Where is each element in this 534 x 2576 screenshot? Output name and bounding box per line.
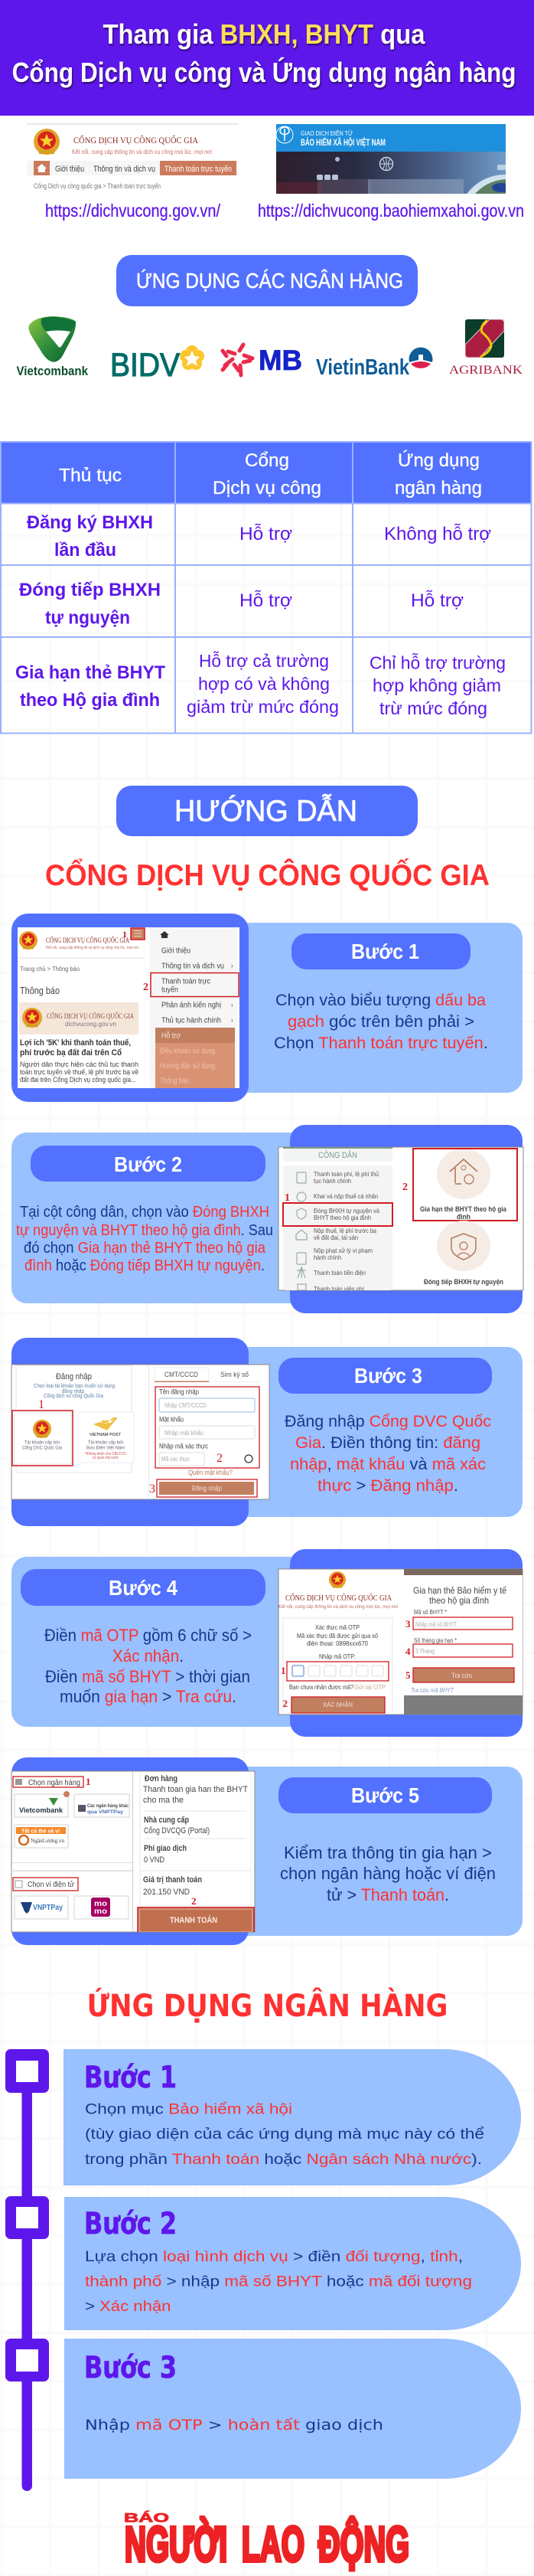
- row: gia hạn thẻ BHYT: giảm trừ mức đóng: [187, 697, 339, 717]
- step 3 text: thực > Đăng nhập .: [317, 1477, 458, 1495]
- step 3 screenshot: Nhập mật khẩu: [164, 1429, 204, 1437]
- step 4 screenshot: Số tháng gia hạn *: [414, 1637, 457, 1644]
- screenshot: Bảo hiểm xã hội Việt Nam header: GIAO DỊCH ĐIỆN TỬ: [301, 129, 353, 137]
- step 3 panel: [11, 1338, 523, 1526]
- step 3 screenshot: Chọn loại tài khoản bạn muốn sử dụng: [34, 1382, 115, 1389]
- heading pill: hướng dẫn: [116, 786, 418, 836]
- step 1 label: Bước 1: [351, 940, 419, 963]
- step 1 screenshot: đất đai trên Cổng Dịch vụ công quốc gia...: [20, 1076, 136, 1084]
- heading pill: hướng dẫn: HƯỚNG DẪN: [174, 794, 357, 828]
- step 1 panel: [11, 914, 523, 1102]
- step 1 screenshot: Trang chủ > Thông báo: [20, 966, 80, 973]
- logo: Vietcombank: [17, 316, 88, 378]
- step 5 screenshot: THANH TOÁN: [170, 1915, 217, 1925]
- step 4 screenshot: Nhập mã OTP:: [319, 1652, 356, 1660]
- step 1 screenshot: Thông tin và dịch vụ: [161, 962, 224, 971]
- step 4 screenshot: XÁC NHẬN: [323, 1701, 353, 1708]
- timeline node 3: [5, 2339, 49, 2381]
- step 3 screenshot: *Không dành cho CBCCVC: [85, 1452, 126, 1456]
- step 1 screenshot: CỔNG DỊCH VỤ CÔNG QUỐC GIA: [47, 1012, 134, 1020]
- step 1 screenshot: Thanh toán trực: [161, 977, 210, 986]
- bank step 1: (tùy giao diện của các ứng dụng mà mục này có thể: [85, 2127, 484, 2143]
- step 2 screenshot: Thanh toán viện phí: [314, 1285, 365, 1293]
- step 1 screenshot: Thông báo: [160, 1077, 189, 1086]
- step 2 screenshot: Nộp thuế, lệ phí trước bạ: [314, 1227, 376, 1234]
- bank step 3: Bước 3: [84, 2351, 177, 2385]
- step 4 screenshot: CỔNG DỊCH VỤ CÔNG QUỐC GIA: [285, 1593, 392, 1603]
- logo: MB: MB: [259, 345, 302, 376]
- heading pill: ứng dụng các ngân hàng: ỨNG DỤNG CÁC NGÂN HÀNG: [136, 269, 403, 293]
- step 2 screenshot: Nộp phạt xử lý vi phạm: [314, 1247, 373, 1254]
- step 2 label: [31, 1146, 265, 1182]
- step 3 label: [278, 1358, 492, 1394]
- step 4 screenshot: [278, 1569, 523, 1715]
- bank step 1: [63, 2049, 521, 2185]
- row: gia hạn thẻ BHYT: theo Hộ gia đình: [20, 690, 160, 711]
- step 3 screenshot: Mật khẩu: [159, 1415, 184, 1424]
- screenshot: Bảo hiểm xã hội Việt Nam header: [276, 124, 506, 194]
- step 5 screenshot: mo: [94, 1907, 107, 1916]
- step 2 label: Bước 2: [114, 1152, 182, 1176]
- step 3 screenshot: Tên đăng nhập: [159, 1388, 199, 1397]
- step 4 panel: [11, 1549, 523, 1737]
- logo: báo Người Lao Động: BÁO: [124, 2510, 169, 2525]
- step 1 screenshot: Thủ tục hành chính: [161, 1015, 221, 1025]
- step 1 screenshot: ›: [231, 1002, 233, 1008]
- title banner: [0, 0, 534, 116]
- step 5 screenshot: Các ngân hàng khác: [87, 1803, 129, 1809]
- step 2 text: Tại cột công dân, chọn vào Đóng BHXH: [20, 1204, 269, 1221]
- title text: Tham gia BHXH, BHYT qua: [103, 18, 425, 50]
- step 3 screenshot: 1: [38, 1398, 44, 1411]
- step 2 screenshot: đình: [457, 1213, 471, 1221]
- step 5 text: chọn ngân hàng hoặc ví điện: [280, 1864, 496, 1883]
- step 4 screenshot: 2: [283, 1698, 288, 1709]
- screenshot: Cổng Dịch vụ công quốc gia header: Kết nối, cung cấp thông tin và dịch vụ công mọi lúc, mọi nơi: [72, 149, 212, 155]
- step 5 text: [280, 1843, 496, 1904]
- step 1 screenshot: Người dân thực hiện các thủ tục thanh: [20, 1061, 138, 1068]
- step 4 text: Điền mã số BHYT > thời gian: [45, 1667, 250, 1686]
- step 2 screenshot: hành chính: [314, 1254, 341, 1261]
- step 1 screenshot: Kết nối, cung cấp thông tin và dịch vụ công mọi lúc, mọi nơi: [46, 946, 138, 950]
- step 2 screenshot: Đóng tiếp BHXH tự nguyện: [424, 1278, 503, 1286]
- step 4 screenshot: Nhập mã số BHYT: [415, 1621, 457, 1628]
- step 2 screenshot: tục hành chính: [314, 1177, 351, 1185]
- step 1 screenshot: Giới thiệu: [161, 946, 190, 956]
- step 5 screenshot: mo: [94, 1900, 107, 1908]
- step 1 screenshot: ›: [231, 1017, 233, 1024]
- row: gia hạn thẻ BHYT: Gia hạn thẻ BHYT: [15, 662, 165, 683]
- step 3 screenshot: Nhập mã xác thực: [159, 1443, 208, 1450]
- step 1 label: [291, 933, 471, 969]
- step 2 screenshot: Khai và nộp thuế cá nhân: [314, 1192, 378, 1200]
- step 4 screenshot: 4: [405, 1646, 411, 1657]
- step 3 screenshot: Tài khoản cấp bởi: [88, 1438, 123, 1446]
- step 5 screenshot: Chọn ngân hàng: [28, 1778, 80, 1787]
- step 1 screenshot: 1: [122, 929, 127, 940]
- step 1 screenshot: [18, 927, 239, 1088]
- step 3 text: nhập, mật khẩu và mã xác: [290, 1456, 486, 1473]
- logo: Vietcombank: Vietcombank: [17, 364, 88, 378]
- step 5 screenshot: cho ma the: [143, 1796, 184, 1805]
- step 1 text: gạch góc trên bên phải >: [288, 1013, 474, 1031]
- step 1 text: Chọn vào biểu tượng dấu ba: [275, 992, 486, 1009]
- step 4 screenshot: Kết nối, cung cấp thông tin và dịch vụ công mọi lúc, mọi nơi: [278, 1605, 398, 1610]
- step 5 screenshot: 0 VND: [144, 1855, 164, 1865]
- bank step 1: Chọn mục Bảo hiểm xã hội: [85, 2101, 292, 2118]
- step 5 screenshot: Vietcombank: [19, 1806, 63, 1815]
- row: đóng tiếp BHXH tự nguyện: [19, 580, 464, 628]
- step 3 screenshot: [11, 1365, 269, 1499]
- table header row: [1, 442, 531, 504]
- step 3 screenshot: Mã xác thực: [161, 1455, 190, 1463]
- step 5 screenshot: NgânLượng.vn: [31, 1838, 65, 1844]
- bank step 2: Bước 2: [84, 2207, 177, 2241]
- step 4 text: muốn gia hạn > Tra cứu.: [60, 1687, 236, 1706]
- row: đăng ký BHXH lần đầu: Hỗ trợ: [239, 524, 292, 544]
- row: gia hạn thẻ BHYT: hợp có và không: [198, 674, 330, 694]
- step 3 screenshot: đăng nhập: [62, 1388, 84, 1394]
- step 2 screenshot: CÔNG DÂN: [318, 1150, 357, 1160]
- step 3 screenshot: cơ quan nhà nước: [93, 1456, 119, 1460]
- step 5 screenshot: [11, 1771, 255, 1934]
- step 2 screenshot: Thanh toán phí, lệ phí thủ: [314, 1170, 379, 1178]
- timeline node 2: [5, 2196, 49, 2239]
- step 3 screenshot: Quên mật khẩu?: [188, 1469, 233, 1476]
- step 5 screenshot: 2: [191, 1895, 196, 1907]
- step 1 screenshot: dichvucong.gov.vn: [65, 1020, 116, 1028]
- logo: VietinBank: VietinBank: [316, 355, 410, 380]
- header labels: Thủ tục: [59, 466, 122, 485]
- step 2 screenshot: Gia hạn thẻ BHYT theo hộ gia: [420, 1205, 507, 1214]
- section heading: cổng dịch vụ công quốc gia: CỔNG DỊCH VỤ CÔNG QUỐC GIA: [45, 858, 490, 892]
- step 4 screenshot: theo hộ gia đình: [429, 1595, 489, 1606]
- step 5 screenshot: Phí giao dịch: [144, 1844, 187, 1853]
- row: đăng ký BHXH lần đầu: [27, 512, 491, 561]
- logo: BIDV: BIDV: [110, 347, 180, 384]
- link: dichvucong.gov.vn: https://dichvucong.gov.vn/: [45, 201, 221, 221]
- row: gia hạn thẻ BHYT: trừ mức đóng: [379, 698, 487, 718]
- title text: [12, 18, 516, 88]
- logo: báo Người Lao Động: LAO: [242, 2516, 304, 2571]
- screenshot: Cổng Dịch vụ công quốc gia header: [27, 123, 239, 190]
- bank step 2: thành phố > nhập mã số BHYT hoặc mã đối tượng: [85, 2274, 472, 2290]
- logo: báo Người Lao Động: NGƯỜI: [125, 2516, 227, 2571]
- screenshot: Cổng Dịch vụ công quốc gia header: Thanh toán trực tuyến: [164, 165, 232, 174]
- step 1 screenshot: phí trước bạ đất đai trên Cổ: [20, 1048, 122, 1058]
- step 5 label: [278, 1777, 492, 1813]
- step 3 screenshot: Sim ký số: [220, 1371, 249, 1379]
- row: đăng ký BHXH lần đầu: lần đầu: [54, 540, 116, 561]
- row: đóng tiếp BHXH tự nguyện: Hỗ trợ: [239, 590, 292, 611]
- bank step 3: [64, 2339, 521, 2479]
- step 5 label: Bước 5: [351, 1783, 419, 1807]
- step 1 screenshot: tuyến: [161, 985, 178, 994]
- step 3 screenshot: Bưu Điện Việt Nam: [86, 1446, 125, 1450]
- step 1 text: [274, 992, 488, 1052]
- step 4 text: Xác nhận.: [112, 1646, 184, 1666]
- header labels: ngân hàng: [395, 478, 482, 499]
- step 2 screenshot: [278, 1147, 523, 1293]
- step 5 screenshot: 201.150 VND: [143, 1888, 190, 1897]
- step 4 screenshot: Xác thực mã OTP: [315, 1623, 360, 1631]
- row: đóng tiếp BHXH tự nguyện: Đóng tiếp BHXH: [19, 580, 161, 600]
- step 4 screenshot: Tra cứu: [451, 1672, 472, 1679]
- step 5 screenshot: 1: [86, 1776, 90, 1787]
- row: gia hạn thẻ BHYT: hợp không giảm: [373, 675, 501, 695]
- row: gia hạn thẻ BHYT: Chỉ hỗ trợ trường: [370, 652, 506, 672]
- bank step 2: > Xác nhận: [85, 2299, 171, 2315]
- logo: báo Người Lao Động: [124, 2510, 409, 2571]
- header labels: Cổng: [245, 450, 289, 471]
- screenshot: Cổng Dịch vụ công quốc gia header: Thông tin và dịch vụ: [93, 165, 155, 174]
- step 2 screenshot: Thanh toán tiền điện: [314, 1269, 366, 1277]
- step 1 screenshot: Hỗ trợ: [161, 1031, 181, 1040]
- step 5 screenshot: qua VNPTPay: [87, 1809, 123, 1815]
- screenshot: Cổng Dịch vụ công quốc gia header: Cổng Dịch vụ công quốc gia > Thanh toán trực tuyến: [34, 182, 161, 190]
- step 5 screenshot: Thanh toan gia han the BHYT: [143, 1785, 248, 1794]
- step 3 screenshot: VIETNAM POST: [90, 1433, 121, 1437]
- step 1 screenshot: CỔNG DỊCH VỤ CÔNG QUỐC GIA: [46, 937, 129, 944]
- step 4 screenshot: Mã xác thực đã được gửi qua số: [297, 1632, 378, 1639]
- screenshot: Bảo hiểm xã hội Việt Nam header: BẢO HIỂM XÃ HỘI VIỆT NAM: [301, 136, 386, 148]
- logo: MB: [223, 345, 302, 376]
- row: gia hạn thẻ BHYT: [15, 651, 506, 718]
- step 4 screenshot: 1: [281, 1665, 286, 1676]
- step 5 screenshot: VNPTPay: [33, 1904, 63, 1912]
- step 2 text: đình hoặc Đóng tiếp BHXH tự nguyện.: [24, 1257, 265, 1274]
- step 1 screenshot: Điều khoản sử dụng: [160, 1046, 215, 1055]
- row: đóng tiếp BHXH tự nguyện: tự nguyện: [45, 608, 130, 628]
- step 3 screenshot: Đăng nhập: [56, 1372, 92, 1381]
- step 4 text: [44, 1626, 252, 1706]
- bank step 3: Nhập mã OTP > hoàn tất giao dịch: [85, 2417, 383, 2434]
- step 4 screenshot: 3 Tháng: [415, 1648, 435, 1655]
- header labels: Dịch vụ công: [213, 478, 321, 499]
- step 2 text: đó chọn Gia hạn thẻ BHYT theo hộ gia: [24, 1240, 266, 1257]
- step 4 screenshot: 5: [405, 1669, 411, 1681]
- step 2 text: [16, 1204, 273, 1274]
- step 4 screenshot: Gia hạn thẻ Bảo hiểm y tế: [413, 1585, 506, 1596]
- step 5 screenshot: Nhà cung cấp: [144, 1816, 189, 1825]
- bank step 1: trong phần Thanh toán hoặc Ngân sách Nhà nước ).: [85, 2152, 482, 2168]
- step 1 screenshot: Phản ánh kiến nghị: [161, 1000, 221, 1009]
- step 5 screenshot: Chọn ví điện tử: [28, 1880, 74, 1889]
- step 1 screenshot: toán trực tuyến về thuế, lệ phí trước bạ về: [20, 1068, 138, 1076]
- step 2 screenshot: BHYT theo hộ gia đình: [314, 1214, 371, 1221]
- logo: Agribank: AGRIBANK: [449, 364, 523, 377]
- step 5 screenshot: Đơn hàng: [145, 1774, 177, 1783]
- step 3 text: Đăng nhập Cổng DVC Quốc: [285, 1413, 491, 1430]
- step 5 text: tử > Thanh toán.: [327, 1885, 449, 1904]
- step 4 label: Bước 4: [109, 1576, 177, 1600]
- step 2 screenshot: 2: [402, 1182, 408, 1193]
- step 3 screenshot: Đăng nhập: [192, 1484, 222, 1492]
- step 3 text: Gia. Điền thông tin: đăng: [295, 1434, 480, 1452]
- step 4 screenshot: Mã số BHYT *: [414, 1609, 447, 1616]
- section heading: ứng dụng ngân hàng: ỨNG DỤNG NGÂN HÀNG: [87, 1987, 448, 2024]
- step 5 screenshot: Giá trị thanh toán: [143, 1875, 202, 1885]
- step 5 panel: [11, 1757, 523, 1945]
- heading pill: ứng dụng các ngân hàng: [116, 255, 418, 306]
- step 5 text: Kiểm tra thông tin gia hạn >: [284, 1843, 492, 1862]
- step 4 screenshot: Tra cứu mã BHYT: [411, 1687, 454, 1694]
- bank step 2: Lựa chọn loại hình dịch vụ > điền đối tượng , tỉnh ,: [85, 2249, 463, 2265]
- step 3 screenshot: 2: [217, 1452, 223, 1465]
- step 2 text: tự nguyện và BHYT theo hộ gia đình. Sau: [16, 1222, 273, 1239]
- screenshot: Cổng Dịch vụ công quốc gia header: Giới thiệu: [55, 165, 84, 174]
- step 3 text: [285, 1413, 491, 1495]
- step 2 screenshot: 1: [285, 1192, 290, 1204]
- comparison table: [1, 442, 531, 734]
- step 3 screenshot: Tài khoản cấp bởi: [24, 1438, 60, 1446]
- step 5 screenshot: Cổng DVCQG (Portal): [144, 1826, 210, 1836]
- step 3 screenshot: CMT/CCCD: [164, 1371, 198, 1379]
- header labels: [59, 450, 482, 499]
- logo: báo Người Lao Động: ĐỘNG: [318, 2516, 409, 2571]
- step 1 screenshot: 2: [143, 982, 148, 993]
- step 4 screenshot: Bạn chưa nhận được mã?: [289, 1683, 353, 1691]
- logo: Agribank: [449, 319, 523, 377]
- step 4 screenshot: 3: [405, 1618, 411, 1630]
- step 3 screenshot: Cổng DVC Quốc Gia: [22, 1444, 62, 1450]
- step 1 text: Chọn Thanh toán trực tuyến .: [274, 1035, 488, 1052]
- step 4 text: Điền mã OTP gồm 6 chữ số >: [44, 1626, 252, 1645]
- header labels: Ứng dụng: [398, 450, 480, 471]
- step 1 screenshot: Hướng dẫn sử dụng: [160, 1061, 215, 1071]
- step 5 screenshot: Tất cả thẻ và ví: [21, 1829, 60, 1835]
- step 3 label: Bước 3: [354, 1364, 422, 1388]
- bank step 1: Bước 1: [84, 2061, 177, 2095]
- timeline node 1: [5, 2049, 49, 2093]
- step 2 screenshot: về đất đai, tài sản: [314, 1234, 358, 1241]
- step 1 screenshot: ›: [231, 963, 233, 969]
- step 4 label: [21, 1569, 265, 1606]
- step 1 screenshot: Thông báo: [20, 985, 60, 996]
- bank step 2: [64, 2197, 521, 2330]
- step 4 screenshot: Gửi lại OTP: [354, 1683, 386, 1691]
- row: đăng ký BHXH lần đầu: Không hỗ trợ: [384, 524, 491, 544]
- step 3 screenshot: 3: [149, 1483, 155, 1496]
- step 2 screenshot: Đóng BHXH tự nguyện và: [314, 1207, 379, 1214]
- row: gia hạn thẻ BHYT: Hỗ trợ cả trường: [199, 651, 329, 671]
- step 2 panel: [11, 1125, 523, 1313]
- timeline: [5, 2049, 49, 2491]
- step 1 screenshot: Lợi ích '5K' khi thanh toán thuế,: [20, 1038, 131, 1048]
- row: đóng tiếp BHXH tự nguyện: Hỗ trợ: [411, 590, 464, 611]
- step 3 screenshot: Cổng dịch vụ công Quốc Gia: [44, 1392, 104, 1399]
- screenshot: Cổng Dịch vụ công quốc gia header: CỔNG DỊCH VỤ CÔNG QUỐC GIA: [73, 134, 198, 145]
- step 4 screenshot: điện thoại: 0898xxx670: [307, 1639, 368, 1647]
- row: đăng ký BHXH lần đầu: Đăng ký BHXH: [27, 512, 153, 533]
- step 3 screenshot: Nhập CMT/CCCD: [164, 1401, 207, 1409]
